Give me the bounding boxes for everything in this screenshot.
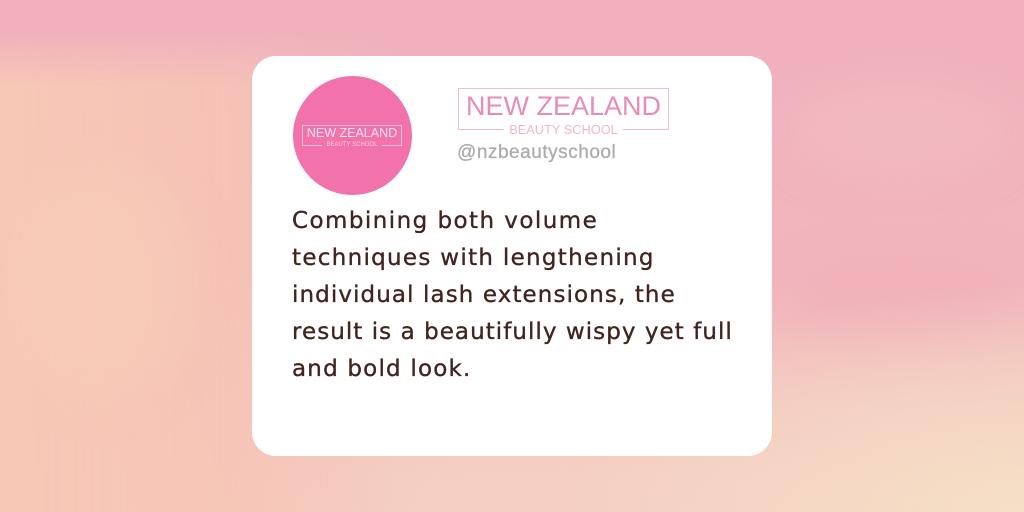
quote text block: techniques with lengthening	[292, 245, 655, 271]
logo text: small subtitle	[322, 141, 382, 149]
quote text block: result is a beautifully wispy yet full	[292, 319, 733, 345]
logo text: small subtitle: BEAUTY SCHOOL	[327, 142, 377, 148]
logo text: large subtitle: BEAUTY SCHOOL	[509, 122, 618, 137]
logo: wordmark with frame	[458, 88, 669, 137]
panel: white quote card	[252, 56, 772, 456]
logo frame: large	[458, 88, 669, 130]
handle text: @nzbeautyschool	[457, 142, 616, 163]
logo text: large name: NEW ZEALAND	[466, 91, 661, 121]
quote text block	[292, 208, 733, 382]
quote text block: and bold look.	[292, 356, 472, 382]
logo frame: small	[302, 125, 402, 146]
quote text block: individual lash extensions, the	[292, 282, 676, 308]
logo text: small name: NEW ZEALAND	[307, 126, 397, 140]
icon: pink circular logo	[293, 76, 412, 195]
quote text block: Combining both volume	[292, 208, 598, 234]
